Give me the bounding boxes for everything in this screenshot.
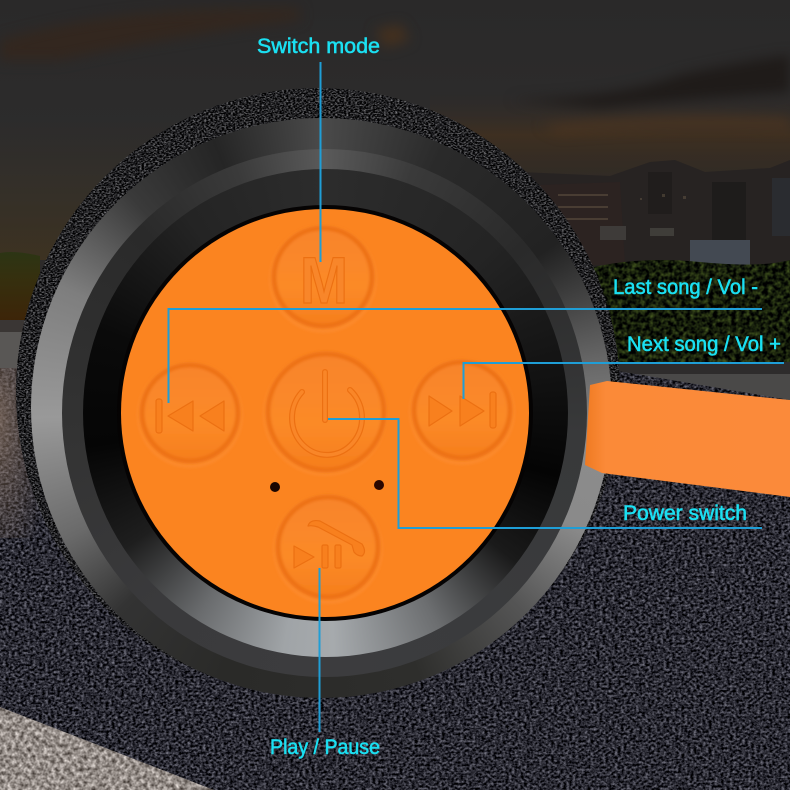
callout: last song / vol - bbox=[168, 276, 762, 403]
hedge bbox=[0, 252, 790, 362]
callout: play / pause: Play / Pause bbox=[270, 736, 380, 759]
pavement bbox=[0, 320, 40, 332]
button: mode M bbox=[269, 225, 377, 333]
clouds bbox=[0, 8, 790, 134]
button: previous bbox=[137, 362, 243, 468]
callout: power switch: Power switch bbox=[623, 502, 747, 525]
city skyline bbox=[520, 160, 790, 270]
microphone hole left bbox=[270, 482, 280, 492]
callout: power switch bbox=[328, 419, 762, 528]
speaker housing inner ring bbox=[83, 169, 568, 657]
road surface bbox=[0, 368, 790, 790]
callout: last song / vol -: Last song / Vol - bbox=[613, 276, 758, 299]
speaker housing outer ring bbox=[31, 118, 612, 698]
callout: switch mode: Switch mode bbox=[257, 35, 380, 58]
button: play pause and call bbox=[273, 494, 383, 604]
callout: next song / vol + bbox=[464, 333, 784, 399]
button: mode M: M bbox=[300, 243, 348, 317]
button: next bbox=[409, 359, 515, 465]
callout: next song / vol +: Next song / Vol + bbox=[627, 333, 781, 356]
button panel bbox=[121, 209, 529, 617]
button: power bbox=[263, 352, 387, 476]
speaker fabric body bbox=[16, 88, 620, 696]
speaker housing middle ring bbox=[62, 149, 587, 677]
black gasket around button panel bbox=[117, 205, 533, 621]
curb bbox=[0, 707, 214, 790]
strap bbox=[585, 381, 790, 497]
microphone hole right bbox=[374, 480, 384, 490]
